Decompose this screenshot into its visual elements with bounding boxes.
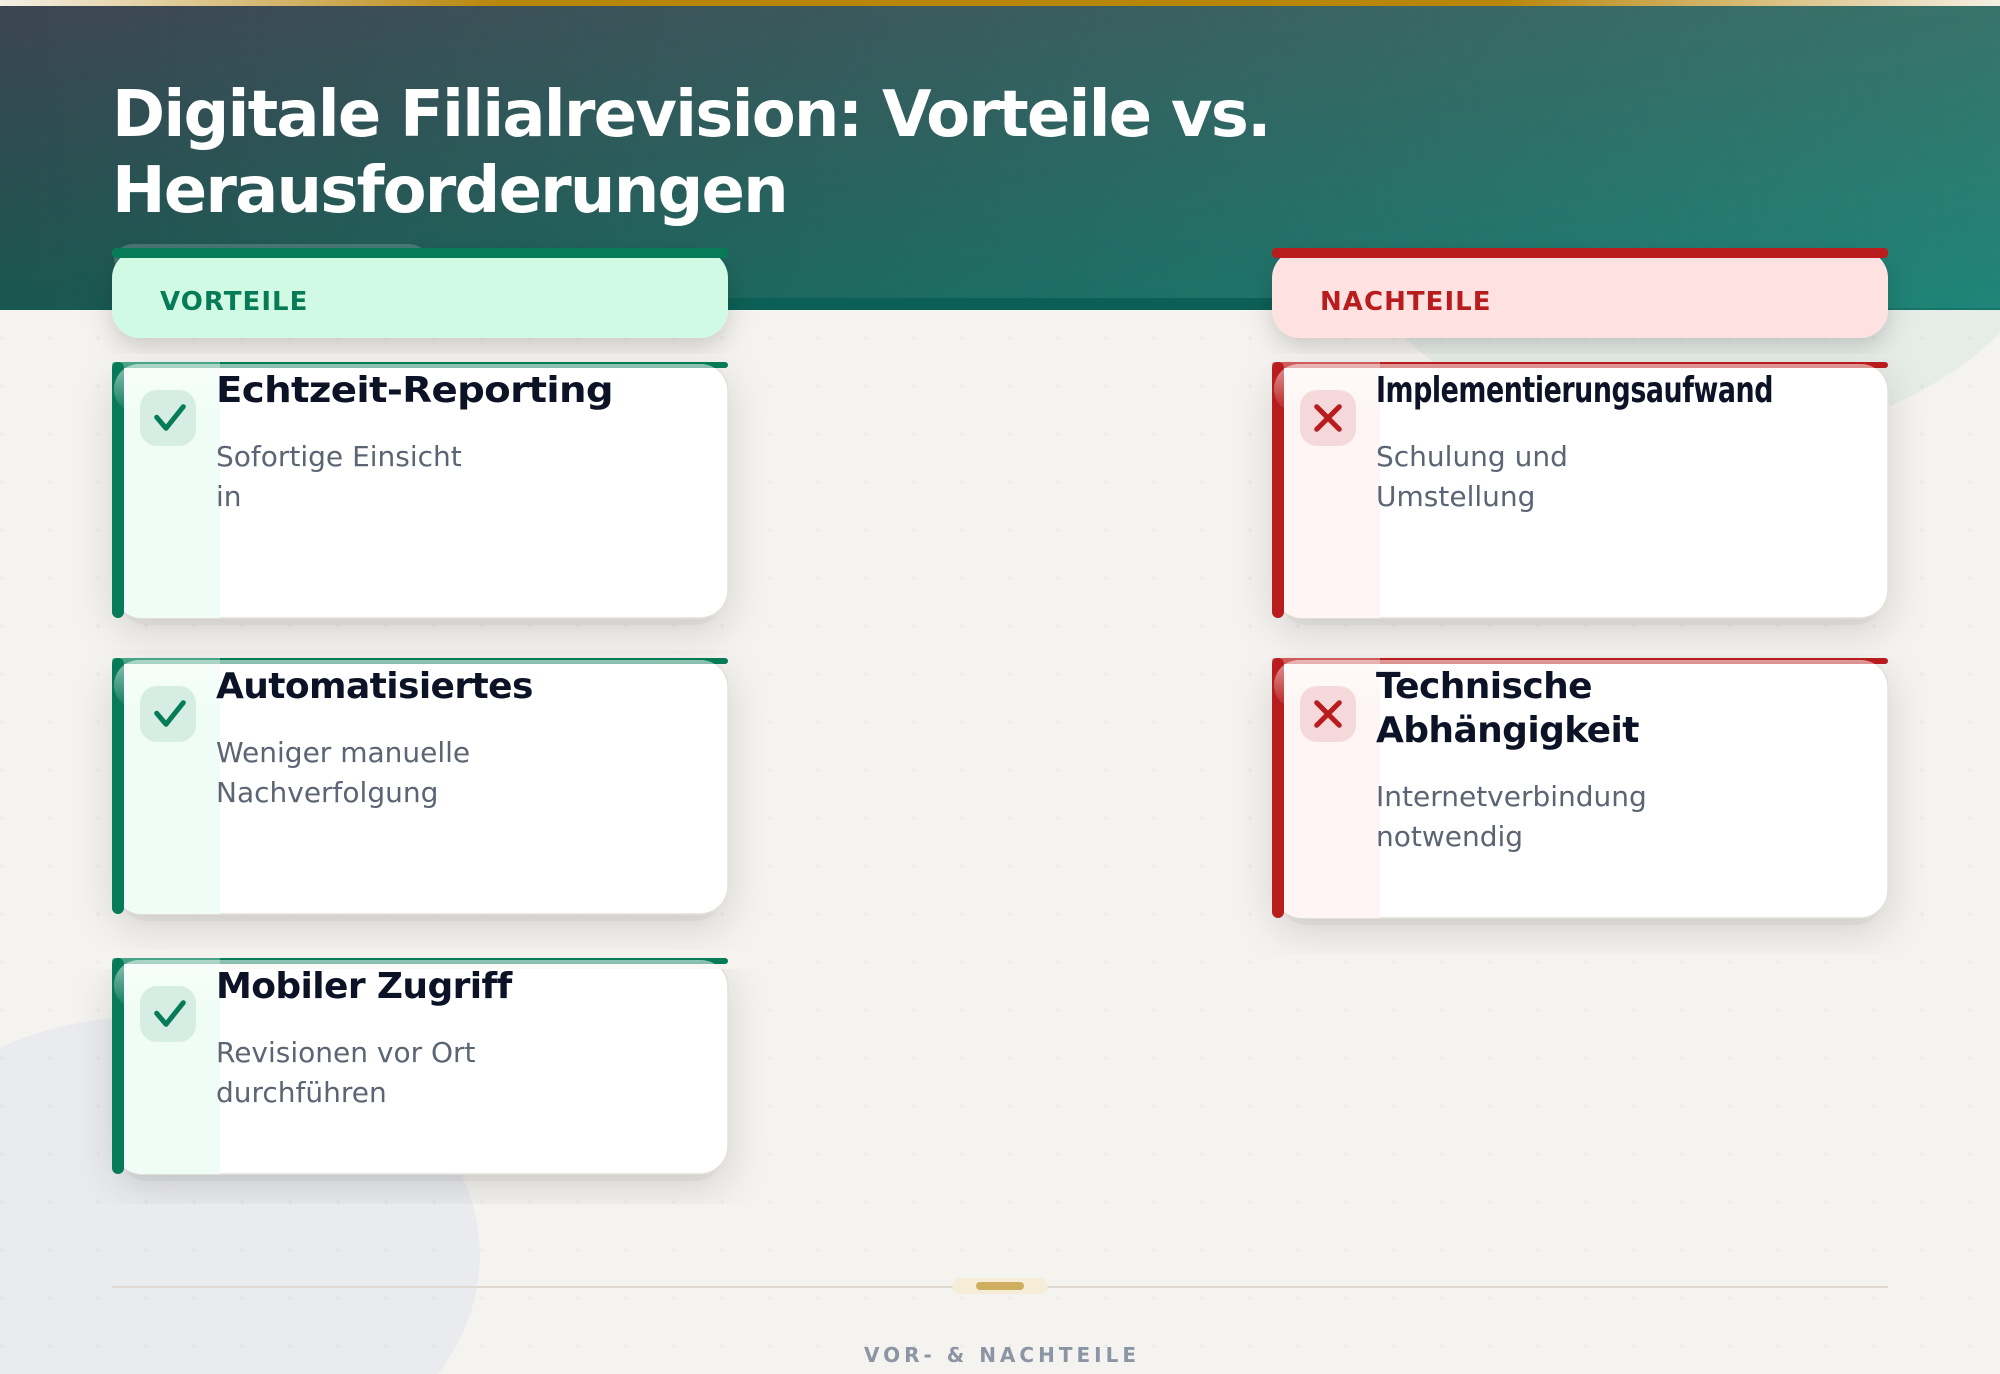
card: Echtzeit-Reporting: in (216, 480, 242, 513)
panel: Nachteile heading (1272, 248, 1888, 338)
icon: check (140, 686, 196, 742)
card: Automatisiertes (112, 658, 728, 921)
card: Implementierungsaufwand: Umstellung (1376, 480, 1535, 513)
footer label: VOR- & NACHTEILE (864, 1343, 1140, 1367)
card: Technische Abhängigkeit: notwendig (1376, 820, 1523, 853)
background blob: top right (1379, 310, 2000, 445)
top gold accent bar (0, 0, 2000, 6)
card: Automatisiertes: Automatisiertes (216, 666, 533, 707)
card: Technische Abhängigkeit: Technische (1376, 666, 1592, 707)
card: Mobiler Zugriff (112, 958, 728, 1181)
icon: cross (1300, 686, 1356, 742)
panel: Vorteile heading (112, 248, 728, 338)
card: Implementierungsaufwand: Implementierungsaufwand (1376, 370, 1773, 411)
title (112, 78, 1270, 228)
card: Echtzeit-Reporting (112, 362, 728, 625)
title highlight pill (114, 244, 428, 274)
icon: check (140, 390, 196, 446)
header band (0, 0, 2000, 310)
footer divider (112, 1278, 1888, 1294)
card: Automatisiertes: Weniger manuelle (216, 736, 470, 769)
panel: Nachteile heading: NACHTEILE (1320, 287, 1492, 317)
icon: cross (1300, 390, 1356, 446)
title: Herausforderungen (112, 154, 787, 228)
card: Mobiler Zugriff: Mobiler Zugriff (216, 966, 513, 1007)
card: Mobiler Zugriff: durchführen (216, 1076, 387, 1109)
card: Implementierungsaufwand (1272, 362, 1888, 625)
title: Digitale Filialrevision: Vorteile vs. (112, 78, 1270, 152)
background blob: bottom left (0, 1015, 480, 1374)
card: Technische Abhängigkeit: Internetverbindung (1376, 780, 1647, 813)
card: Technische Abhängigkeit: Abhängigkeit (1376, 710, 1639, 751)
card: Echtzeit-Reporting: Echtzeit-Reporting (216, 370, 613, 411)
card: Implementierungsaufwand: Schulung und (1376, 440, 1568, 473)
panel: Vorteile heading: VORTEILE (160, 287, 308, 317)
card: Mobiler Zugriff: Revisionen vor Ort (216, 1036, 476, 1069)
icon: check (140, 986, 196, 1042)
card: Technische Abhängigkeit (1272, 658, 1888, 925)
card: Echtzeit-Reporting: Sofortige Einsicht (216, 440, 462, 473)
card: Automatisiertes: Nachverfolgung (216, 776, 438, 809)
